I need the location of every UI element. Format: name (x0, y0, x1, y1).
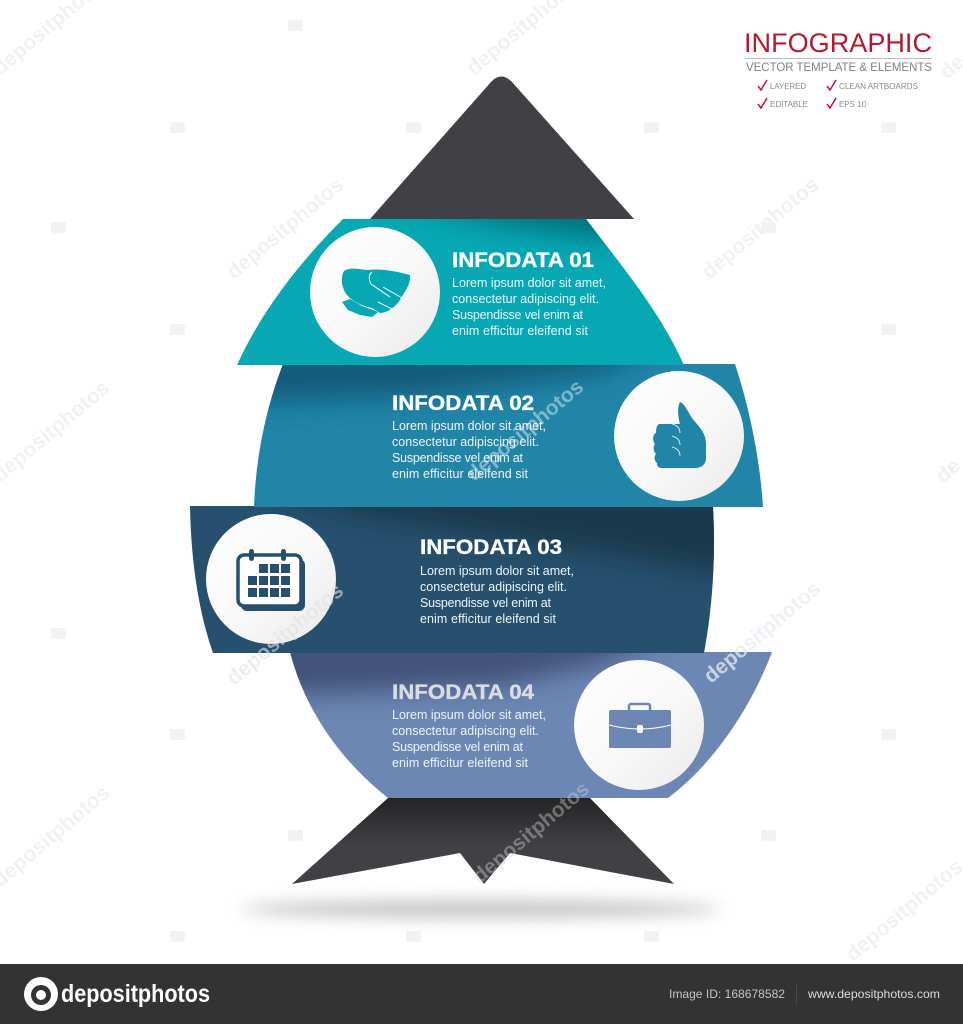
band 2 (254, 364, 763, 507)
band 4 text: consectetur adipiscing elit. (392, 724, 539, 738)
band 2 text: INFODATA 02 (392, 392, 534, 415)
feature checklist (758, 80, 918, 109)
header title: INFOGRAPHIC (744, 28, 932, 58)
faint background watermarks: depositphotos (697, 173, 823, 284)
header subtitle: VECTOR TEMPLATE & ELEMENTS (746, 62, 932, 74)
band 3 text: consectetur adipiscing elit. (420, 580, 567, 594)
footer bar (0, 964, 963, 1024)
band 3 text: Suspendisse vel enim at (420, 596, 552, 610)
band 4 text: INFODATA 04 (392, 681, 534, 704)
website url: www.depositphotos.com (807, 987, 940, 1001)
band 4 text: Lorem ipsum dolor sit amet, (392, 708, 546, 722)
watermarks over bands: depositphotos (468, 777, 594, 888)
feature checklist: EDITABLE (770, 99, 808, 109)
band 2 text: enim efficitur eleifend sit (392, 467, 529, 481)
band 2 text: consectetur adipiscing elit. (392, 435, 539, 449)
circle 1 (310, 227, 440, 357)
band 2 text (392, 392, 546, 481)
band 4 (290, 652, 772, 798)
circle 3 (206, 514, 336, 644)
band 2 text: Suspendisse vel enim at (392, 451, 524, 465)
band 3 text (420, 536, 574, 626)
faint background watermarks: depositphotos (222, 173, 348, 284)
band 1 text (452, 249, 606, 338)
watermarks over bands: depositphotos (699, 577, 825, 688)
band 3 (190, 506, 714, 653)
band 3 text: INFODATA 03 (420, 536, 562, 559)
circle 2 (614, 371, 744, 501)
image id: Image ID: 168678582 (669, 987, 785, 1001)
feature checklist: CLEAN ARTBOARDS (839, 81, 918, 91)
band 2 text: Lorem ipsum dolor sit amet, (392, 419, 546, 433)
feature checklist: LAYERED (770, 81, 806, 91)
band 3 shape (190, 506, 714, 653)
rocket nose (370, 76, 634, 219)
icon: handshake (342, 269, 410, 317)
watermarks over bands: depositphotos (222, 579, 348, 690)
rocket fins (292, 798, 674, 884)
band 1 text: INFODATA 01 (452, 249, 594, 272)
header block (744, 28, 932, 109)
band 1 text: Lorem ipsum dolor sit amet, (452, 276, 606, 290)
footer logo: depositphotos (61, 980, 210, 1008)
icon: thumbs up (653, 402, 706, 468)
feature checklist: EPS 10 (839, 99, 866, 109)
band 1 shape (237, 219, 684, 365)
band 3 text: enim efficitur eleifend sit (420, 612, 557, 626)
band 4 shape (290, 652, 772, 798)
band 1 text: Suspendisse vel enim at (452, 308, 584, 322)
watermarks over bands: depositphotos (462, 375, 588, 486)
band 4 text: Suspendisse vel enim at (392, 740, 524, 754)
watermarks over bands (222, 375, 825, 888)
icon: calendar (238, 549, 305, 611)
band 1 text: consectetur adipiscing elit. (452, 292, 599, 306)
footer logo (24, 977, 210, 1011)
ground shadow (241, 900, 721, 918)
icon: briefcase (609, 704, 671, 748)
band 1 text: enim efficitur eleifend sit (452, 324, 589, 338)
band 3 text: Lorem ipsum dolor sit amet, (420, 564, 574, 578)
band 1 (237, 219, 684, 365)
circle 4 (574, 660, 704, 790)
band 2 shape (254, 364, 763, 507)
band 4 text: enim efficitur eleifend sit (392, 756, 529, 770)
band 4 text (392, 681, 546, 770)
